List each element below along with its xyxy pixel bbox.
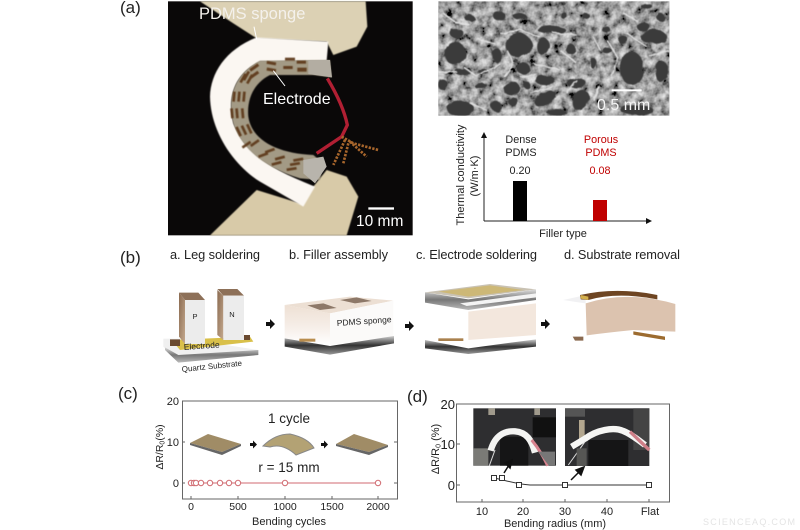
x axis title: Bending radius (mm) [504,518,606,530]
bar chart: thermal conductivity: 0.20 [509,165,531,177]
scale bar 10 mm [368,207,394,210]
panel c: resistance vs bending cycles [118,384,398,528]
data series: red line with circle markers [188,480,381,486]
photo labels [199,5,403,230]
x axis title: Filler type [539,228,587,240]
y tick labels: 20 [167,396,179,408]
x tick labels: 40 [601,506,613,518]
inset photo: large radius [565,408,649,466]
SEM micrograph of porous PDMS [438,1,669,116]
grey device layer [231,60,332,180]
step d: substrate removal curved block [563,291,675,341]
arrow to small radius point [504,460,512,473]
arrow [541,319,550,329]
flat device icon [190,434,241,455]
step titles: a. Leg soldering [170,247,260,262]
x tick labels: 0 [188,501,194,513]
porous PDMS label: 0.08 [589,165,611,177]
copper wires [333,137,378,165]
y axis title: ΔR/R [430,448,442,474]
y axis title: (%) [430,424,442,444]
x tick labels: 500 [229,501,247,513]
step a labels [181,310,243,374]
annotation: 1 cycle: 1 cycle [268,411,310,426]
SEM scale bar [612,89,642,91]
step a labels: P [192,312,198,321]
arrow to large radius point [571,467,584,480]
y axis title [455,124,481,225]
step a labels: Electrode [183,339,220,352]
dense PDMS label: Dense [505,134,537,146]
x tick labels: 1000 [273,501,297,513]
step a labels: Quartz Substrate [181,359,243,374]
inset photo: small radius [473,408,556,466]
photo: bent device held by fingers [168,1,413,235]
white PDMS sponge strip [210,37,328,207]
bar chart: thermal conductivity: PDMS [505,147,537,159]
porous PDMS label: PDMS [585,147,617,159]
electrode bars [230,58,307,171]
bent device icon [263,434,314,455]
panel label c: (c) [118,384,138,403]
x tick labels [476,506,659,518]
x tick labels: 10 [476,506,488,518]
panel b: fabrication steps [120,247,680,374]
step c: electrode soldering block [425,284,536,354]
step a: legs on quartz substrate [163,289,258,363]
lower finger [210,170,358,235]
step titles: b. Filler assembly [289,247,389,262]
annotation: bending radius: r = 15 mm [258,460,320,475]
x tick labels: 20 [517,506,529,518]
panel d: resistance vs bending radius [407,387,670,530]
step a labels: N [229,310,235,319]
data series: black line with square markers [492,476,652,488]
bar: porous PDMS [593,200,607,221]
y tick labels [167,396,179,490]
step b label: PDMS sponge [336,314,392,328]
y axis title: (%) [154,424,166,441]
x tick labels: 30 [559,506,571,518]
panel label d: (d) [407,387,428,406]
SEM scale label: 0.5 mm [597,97,650,114]
y axis title: ΔR/R [154,445,166,470]
panel a: photo and SEM with conductivity chart [120,0,669,240]
y axis title: (W/m·K) [469,156,481,196]
watermark: SCIENCEAQ.COM [703,517,795,527]
y axis title: 0 [436,444,442,448]
x tick labels: 2000 [366,501,390,513]
y tick labels: 10 [167,437,179,449]
photo labels: 10 mm [356,213,403,230]
arrow [405,321,414,331]
step titles: c. Electrode soldering [416,247,537,262]
axes with arrows [484,137,647,221]
bar chart: thermal conductivity [455,124,652,240]
y tick labels: 10 [441,437,455,452]
upper finger [200,1,367,55]
arrow [321,440,328,448]
y axis title: 0 [160,441,166,445]
step titles: d. Substrate removal [564,247,680,262]
x axis title: Bending cycles [252,516,326,528]
y tick labels: 20 [441,397,455,412]
panel label b: (b) [120,248,141,267]
x tick labels: 1500 [320,501,344,513]
flat device icon [336,434,388,455]
x tick labels: Flat [641,506,659,518]
red wire [317,78,347,153]
bar: dense PDMS [513,181,527,221]
porous PDMS label [584,134,619,177]
y tick labels: 0 [448,478,455,493]
y tick labels: 0 [173,478,179,490]
photo labels: PDMS sponge [199,5,305,23]
step b: filler assembly block [285,297,394,355]
x tick labels [188,501,390,513]
porous PDMS label: Porous [584,134,619,146]
arrow [250,440,257,448]
chart frame and ticks [456,404,670,502]
grey tab ends [303,157,327,183]
leader lines [254,27,285,86]
arrow [266,319,275,329]
photo labels: Electrode [263,91,331,108]
y tick labels [441,397,455,493]
chart frame and ticks [182,401,398,499]
step titles [170,247,680,262]
y axis title: Thermal conductivity [455,124,467,225]
